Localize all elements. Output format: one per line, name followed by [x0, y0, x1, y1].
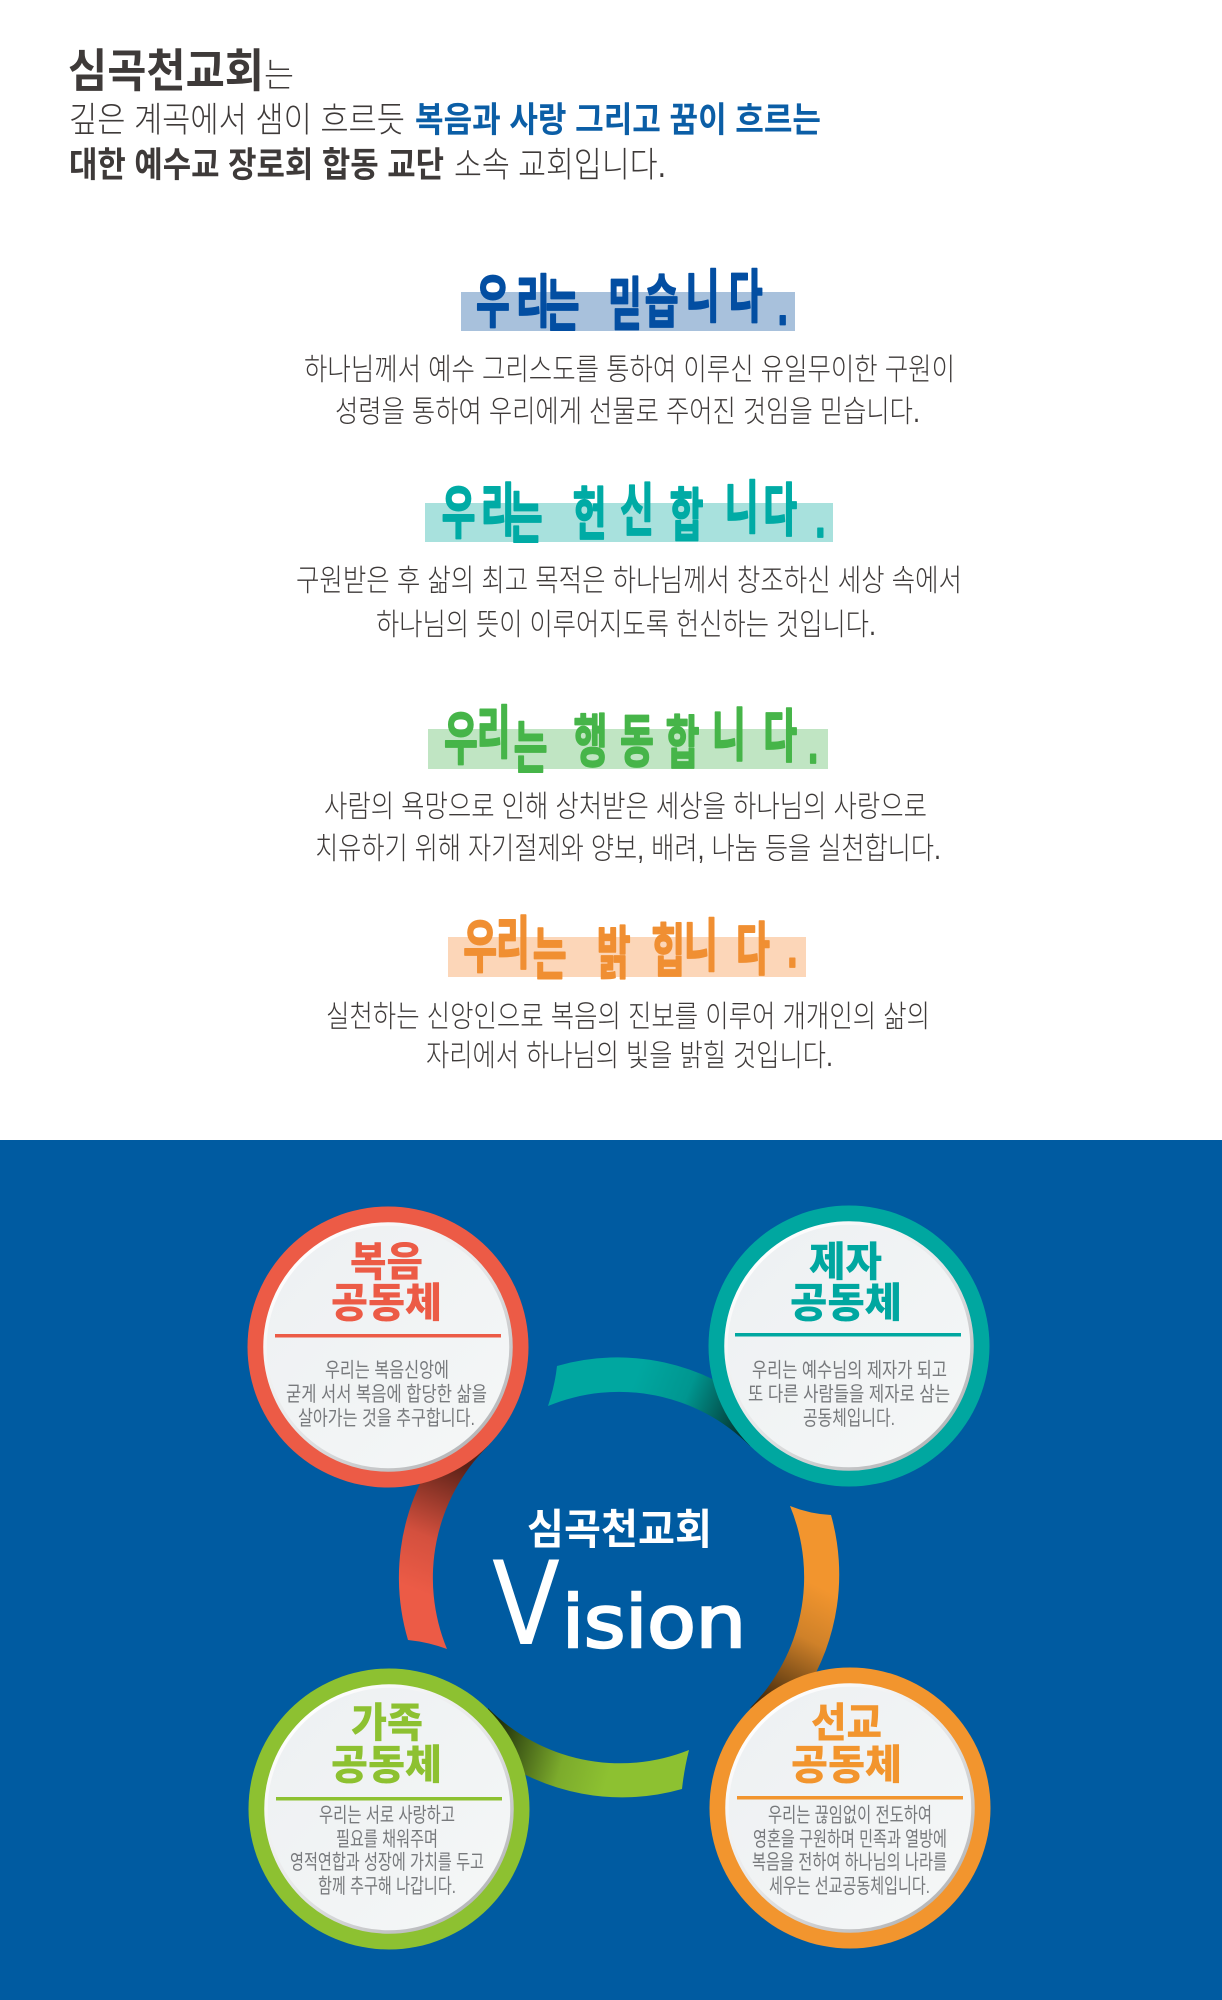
- text: faith: [304, 353, 955, 429]
- center title: 심곡천교회 Vision: [492, 1506, 746, 1672]
- text: faith: 성령을 통하여 우리에게 선물로 주어진 것임을 믿습니다.: [335, 395, 920, 429]
- circle: 가족 공동체: 영적연합과 성장에 가치를 두고: [290, 1851, 484, 1874]
- ribbon: teal: [548, 1357, 760, 1446]
- center title: 심곡천교회 Vision: 심곡천교회: [527, 1506, 712, 1553]
- circle: 가족 공동체: 필요를 채워주며: [336, 1828, 438, 1851]
- text: dedication: [296, 564, 962, 642]
- circle: 복음 공동체: 굳게 서서 복음에 합당한 삶을: [286, 1383, 487, 1406]
- heading: 우리는 믿습니다: 우리는믿습니다.: [476, 266, 788, 339]
- circle: 복음 공동체: [248, 1206, 528, 1488]
- intro text: 깊은 계곡에서 샘이 흐르듯: [69, 101, 405, 140]
- circle: 제자 공동체: 공동체: [790, 1280, 902, 1326]
- intro text: [68, 45, 821, 185]
- heading: 우리는 행동합니다: 우리는행동합니다.: [444, 702, 818, 781]
- text: light: 실천하는 신앙인으로 복음의 진보를 이루어 개개인의 삶의: [326, 1000, 930, 1034]
- circle: 선교 공동체: 복음을 전하여 하나님의 나라를: [752, 1851, 947, 1874]
- text: faith: 하나님께서 예수 그리스도를 통하여 이루신 유일무이한 구원이: [304, 353, 955, 387]
- circle: 제자 공동체: 제자: [809, 1239, 882, 1285]
- intro text: 는: [264, 57, 294, 95]
- text: dedication: 구원받은 후 삶의 최고 목적은 하나님께서 창조하신 세상 속에서: [296, 564, 962, 598]
- text: action: 치유하기 위해 자기절제와 양보, 배려, 나눔 등을 실천합니다.: [315, 832, 941, 866]
- text: light: 자리에서 하나님의 빛을 밝힐 것입니다.: [426, 1039, 833, 1073]
- text: action: [315, 790, 941, 866]
- intro text: 대한 예수교 장로회 합동 교단: [69, 146, 444, 185]
- circle: 선교 공동체: 세우는 선교공동체입니다.: [769, 1875, 930, 1898]
- circle: 선교 공동체: 영혼을 구원하며 민족과 열방에: [753, 1828, 947, 1851]
- circle: 가족 공동체: [248, 1668, 530, 1950]
- circle: 복음 공동체: 살아가는 것을 추구합니다.: [298, 1407, 475, 1430]
- circle: 제자 공동체: [708, 1206, 990, 1486]
- ribbon: red: [399, 1416, 488, 1649]
- circle: 선교 공동체: 선교: [811, 1700, 882, 1746]
- text: light: [326, 1000, 930, 1073]
- circle: 가족 공동체: 가족: [351, 1700, 423, 1746]
- circle: 가족 공동체: 함께 추구해 나갑니다.: [318, 1875, 456, 1898]
- intro text: 소속 교회입니다.: [454, 146, 666, 185]
- circle: 복음 공동체: 공동체: [331, 1280, 442, 1326]
- text: dedication: 하나님의 뜻이 이루어지도록 헌신하는 것입니다.: [376, 608, 876, 642]
- center title: 심곡천교회 Vision: V: [492, 1537, 560, 1672]
- circle: 복음 공동체: 복음: [350, 1239, 423, 1285]
- heading: 우리는 헌신합니다: 우리는헌신합니다.: [442, 477, 825, 551]
- circle: 제자 공동체: 공동체입니다.: [803, 1407, 895, 1430]
- circle: 선교 공동체: [710, 1668, 990, 1948]
- circle: 제자 공동체: 우리는 예수님의 제자가 되고: [752, 1359, 947, 1382]
- circle: 가족 공동체: 공동체: [331, 1742, 442, 1788]
- ribbon: orange: [750, 1506, 839, 1708]
- heading: 우리는 밝힙니다: 우리는밝힙니다.: [463, 912, 797, 988]
- intro text: 복음과 사랑 그리고 꿈이 흐르는: [415, 101, 821, 140]
- ribbon: green: [488, 1708, 689, 1797]
- circle: 복음 공동체: 우리는 복음신앙에: [325, 1359, 449, 1382]
- circle: 선교 공동체: 공동체: [791, 1742, 902, 1788]
- circle: 제자 공동체: 또 다른 사람들을 제자로 삼는: [748, 1383, 950, 1406]
- panel: vision background: [0, 1140, 1222, 2000]
- intro text: 심곡천교회: [68, 45, 264, 97]
- text: action: 사람의 욕망으로 인해 상처받은 세상을 하나님의 사랑으로: [324, 790, 927, 824]
- circle: 가족 공동체: 우리는 서로 사랑하고: [319, 1804, 455, 1827]
- center title: 심곡천교회 Vision: ision: [562, 1580, 746, 1664]
- circle: 선교 공동체: 우리는 끊임없이 전도하여: [768, 1804, 932, 1827]
